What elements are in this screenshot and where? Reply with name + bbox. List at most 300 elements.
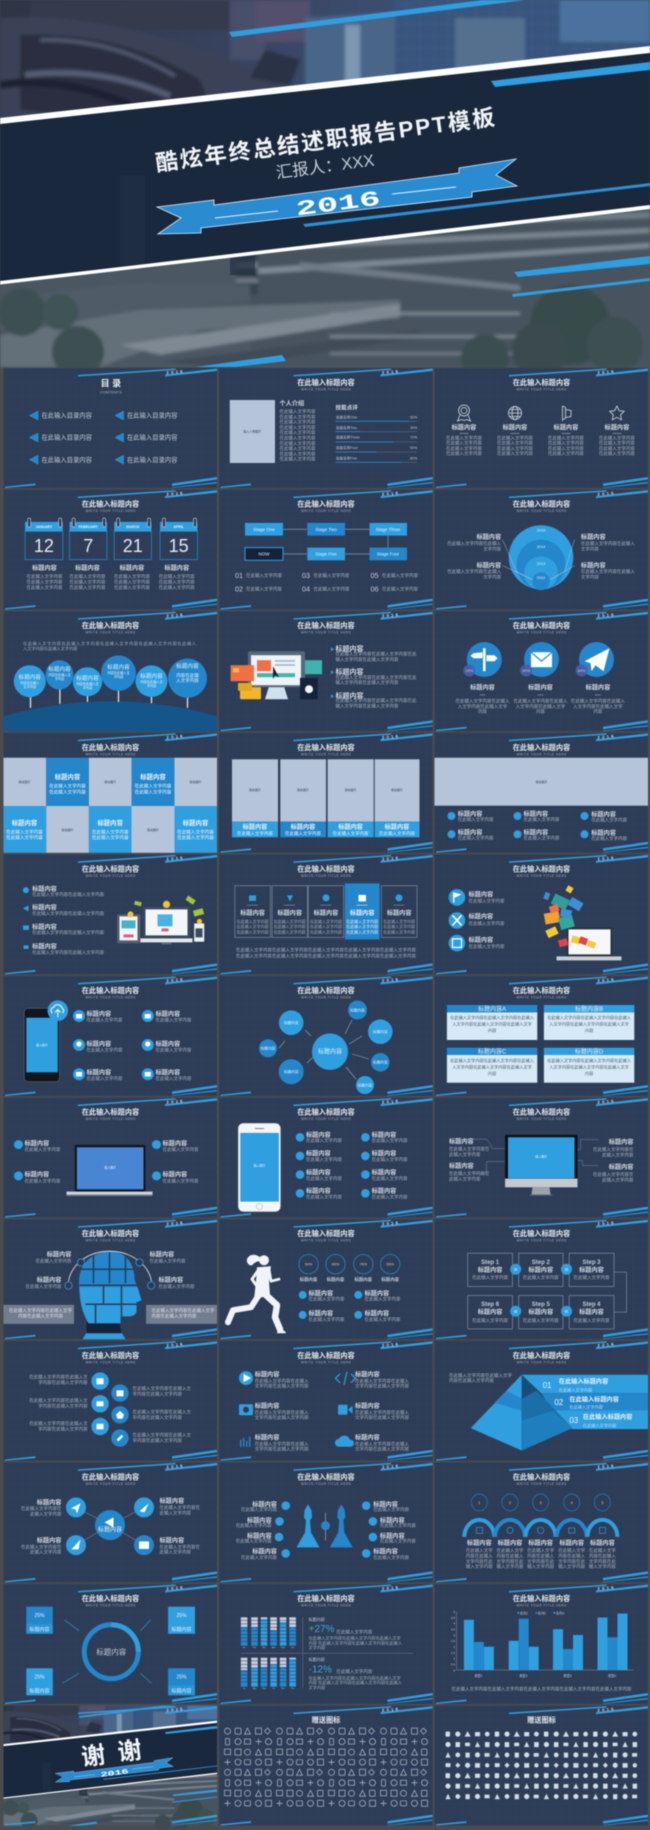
slide: phone features: WRITE YOUR TITLE HERE (86, 996, 136, 1000)
slide: trees: 在此输入标题内容 (82, 621, 139, 630)
lower stat: -12% (309, 1664, 332, 1676)
column cards: 标题内容 (240, 909, 265, 917)
right text: 标题内容 (609, 1138, 634, 1146)
calendar cards: MARCH (126, 525, 140, 529)
media text: 标题内容 (355, 1402, 380, 1410)
items: 标题内容 (458, 828, 482, 836)
runner silhouette (228, 1255, 286, 1333)
captions: 标题内容 (586, 684, 610, 692)
intro text: 在此输入文字内容在此输入文字 (449, 1372, 512, 1379)
column cards: 在此输入文字内容 (274, 929, 306, 935)
intro text (280, 400, 316, 463)
image and text tiles: 标题内容 (97, 818, 124, 827)
bullet text (331, 644, 417, 710)
image and text tiles: 在此输入文字内容 (92, 834, 129, 841)
photo cards: 在此输入文字内容 (285, 830, 321, 837)
pyramid chart: 在此输入标题内容 (569, 1395, 619, 1403)
step boxes: 在此输入文字内容 (472, 1274, 509, 1281)
striped bars: April (272, 1646, 276, 1649)
feature items: 标题内容 (306, 1150, 331, 1158)
contents list: 在此输入目录内容 (127, 411, 178, 420)
step boxes: Step 6 (481, 1302, 500, 1308)
slide: four icons: WRITE YOUR TITLE HERE (516, 388, 566, 392)
slide: five arches: 2016 (597, 1463, 614, 1470)
percent rings: 标题内容 (355, 1276, 373, 1283)
nested oval chart: 2013 (537, 562, 545, 566)
right labels (581, 533, 635, 581)
head illustration (65, 1251, 155, 1339)
column cards: 在此输入文字内容 (383, 929, 415, 935)
slide: email illustration: 在此输入标题内容 (513, 864, 570, 873)
calendar cards (25, 518, 198, 560)
percent rings: 标题内容 (381, 1276, 400, 1283)
numbered list: 在此输入文字内容 (382, 572, 418, 579)
slide: alternating circles: 在此输入标题内容 (82, 1351, 139, 1360)
right labels: 在此输入文字内容在 (160, 1504, 200, 1511)
left labels: 在此输入文字内容在 (21, 1543, 62, 1550)
captions: 内容 (593, 708, 603, 715)
media text (255, 1370, 409, 1452)
arch captions: 输入文字内容 (527, 1563, 555, 1570)
left labels: 此输入文字内容 (30, 1549, 62, 1556)
percent rings: 54% (305, 1263, 313, 1267)
feature items: 在此输入文字内容 (162, 1177, 199, 1184)
step boxes: 在此输入文字内容 (472, 1317, 509, 1324)
nested oval chart: 2015 (537, 529, 545, 533)
image and text tiles: 在此输入文字内容 (49, 788, 86, 795)
icon list: 在此输入文字内容 (468, 920, 505, 927)
slide: trees (4, 611, 217, 731)
pyramid chart: 在此输入文字内容 (559, 1386, 592, 1393)
slide: trees: WRITE YOUR TITLE HERE (86, 631, 136, 635)
cards A-D: 入文字内容在此输入文字内容在此输入文字 (452, 1064, 532, 1070)
skill bars: 技能名称Four (336, 445, 359, 450)
slide: four photos: 2016 (382, 734, 399, 740)
slide: outline icon set: 2016 (382, 1706, 399, 1713)
slide: stage flow: 在此输入标题内容 (297, 500, 355, 509)
skill bars: 80% (410, 456, 418, 460)
left labels (447, 533, 502, 581)
slide: pyramid: 2016 (597, 1342, 614, 1348)
image and text tiles: 填充图片 (61, 827, 74, 832)
slide: bubble diagram: 在此输入标题内容 (297, 986, 355, 995)
slide: email illustration (434, 854, 648, 974)
slide: solid icon set (434, 1706, 648, 1826)
items: 标题内容 (524, 810, 548, 818)
slide: alternating circles: 2016 (166, 1342, 183, 1348)
left labels: 在此输入文字内容在此输入 (447, 540, 502, 547)
icon captions: 在此输入文字内容 (497, 440, 533, 447)
skill bars: 50% (410, 446, 418, 450)
side text boxes: 在此输入文字内容在此输入文字 (9, 1307, 72, 1314)
striped bars: Jan (242, 1647, 246, 1649)
feature items: 标题内容 (306, 1169, 331, 1177)
icon list: 标题内容 (468, 912, 493, 920)
slide: head puzzle (4, 1219, 217, 1339)
right labels: 在此输入文字内容在 (160, 1543, 200, 1550)
column cards (235, 883, 417, 939)
items (299, 1289, 401, 1323)
percent tiles: 标题内容 (171, 1626, 192, 1633)
captions: 在此输入文字内容在此输入 (456, 698, 510, 705)
striped bars: Nov (281, 1688, 285, 1690)
left text: 此输入文字内容 (449, 1175, 481, 1182)
percent rings: 65% (332, 1263, 340, 1267)
calendar captions: 在此输入文字内容 (26, 573, 63, 580)
icon list: 标题内容 (468, 890, 493, 898)
calendar cards: JANUARY (36, 525, 53, 529)
left labels: 标题内容 (476, 562, 501, 570)
captions: 内容 (536, 708, 545, 715)
photo cards: 标题内容 (243, 823, 267, 831)
skill bars: 技能名称Two (336, 425, 357, 430)
right text: 字内容在此输入文字内容 (132, 1437, 182, 1444)
media icons (239, 1371, 356, 1447)
photo cards: 填充图片 (391, 787, 403, 792)
monitor mockup: 插入图片 (535, 1154, 547, 1159)
right text: 标题内容 (609, 1163, 634, 1171)
bar chart: 系列2 (538, 1610, 546, 1615)
image and text tiles: 在此输入文字内容 (6, 828, 43, 835)
slide: calendars: WRITE YOUR TITLE HERE (86, 509, 136, 513)
slide: web illustration: 2016 (382, 612, 399, 618)
slide: four text cards: 2016 (597, 977, 614, 983)
contents list (30, 411, 178, 464)
items: 标题内容 (591, 829, 616, 837)
right labels: 在此输入文字内容在此输入 (581, 540, 635, 547)
cards A-D: 在此输入文字内容在此输入文字内容在此输入 (450, 1014, 535, 1021)
slide: column chart: 在此输入标题内容 (513, 1594, 570, 1603)
slide: personal intro: WRITE YOUR TITLE HERE (301, 388, 351, 392)
photo cards (232, 759, 420, 837)
presenter line: 汇报人：XXX (275, 151, 375, 182)
numbered circles: 1 (478, 1500, 481, 1505)
slide: phone features: 在此输入标题内容 (82, 986, 139, 995)
heading: 目 录 (101, 378, 121, 388)
right labels: 此输入文字内容 (160, 1549, 191, 1556)
flow diagram: Stage Five (315, 552, 337, 557)
captions: 在此输入文字内容在此输入 (571, 698, 625, 705)
slide: checkerboard grid: 在此输入标题内容 (82, 743, 139, 752)
slide: stacked bars and stats (219, 1584, 432, 1704)
items: 标题内容 (591, 810, 616, 818)
right labels: 标题内容 (581, 533, 606, 541)
slide: three icon circles: 2016 (597, 612, 614, 618)
slide: runner: 在此输入标题内容 (297, 1229, 355, 1238)
portrait placeholder: 插入人物图片 (243, 429, 261, 434)
right labels: 标题内容 (380, 1516, 405, 1524)
slide: laptop: 在此输入标题内容 (82, 1108, 139, 1117)
left labels: 在此输入文字内容 (241, 1506, 277, 1513)
arch captions: 标题内容 (467, 1539, 492, 1547)
bar chart: 4.5 (451, 1616, 455, 1620)
calendar captions: 在此输入文字内容 (159, 573, 195, 580)
tree illustration: 标题内容 (107, 663, 130, 671)
arch captions: 内容在此输入 (589, 1553, 616, 1560)
upper stat: 在此输入文字内容 (336, 1628, 373, 1636)
captions: 入文字内容在此输入文字 (516, 703, 566, 710)
left labels: 标题内容 (252, 1548, 277, 1556)
captions (456, 684, 625, 715)
intro text: 在此输入文字内容 (280, 424, 316, 431)
tree illustration: 标题内容 (140, 672, 163, 680)
bullet text: 在此输入文字内容在此输入文字内容在此 (336, 651, 417, 658)
tree illustration: 内容在此输入 (20, 680, 40, 685)
calendar cards: 7 (83, 536, 93, 556)
slide: stage flow: WRITE YOUR TITLE HERE (301, 509, 351, 513)
slide: phone features (4, 976, 217, 1096)
column cards: 在此输入文字内容 (346, 918, 378, 924)
striped bars: Oct (272, 1687, 276, 1690)
right text: 此输入文字内容 (602, 1151, 634, 1158)
calendar cards: 15 (169, 536, 189, 556)
step boxes: « (565, 1308, 569, 1315)
slide: personal intro: 2016 (382, 369, 399, 375)
contents list: 在此输入目录内容 (42, 411, 93, 420)
numbered list: 在此输入文字内容 (382, 586, 418, 593)
slide: four text cards: WRITE YOUR TITLE HERE (516, 996, 566, 1000)
image and text tiles: 在此输入文字内容 (135, 788, 172, 795)
step boxes: 标题内容 (478, 1308, 502, 1316)
contents list: 在此输入目录内容 (127, 455, 178, 464)
image and text tiles: 标题内容 (55, 772, 81, 781)
slide: iphone: WRITE YOUR TITLE HERE (301, 1117, 351, 1121)
step boxes: » (514, 1266, 518, 1273)
step boxes: 标题内容 (579, 1308, 604, 1316)
lower stat: 内容 在此输入文字内容在此输入文字内容在此输入 (309, 1679, 403, 1686)
striped bars: Aug (253, 1687, 256, 1690)
slide: iphone (219, 1098, 432, 1218)
percent rings (299, 1254, 400, 1283)
calendar cards: 12 (34, 536, 54, 556)
media text: 标题内容 (255, 1370, 279, 1378)
feature items: 在此输入文字内容 (306, 1175, 342, 1182)
pyramid chart: 02 (554, 1398, 564, 1407)
icon row (458, 405, 624, 421)
bubbles (259, 1000, 393, 1094)
slide: bubble diagram (219, 976, 432, 1096)
arch captions: 在此输入文字 (527, 1547, 555, 1554)
bullet text: 在此输入文字内容在此输入文字内容在此 (336, 697, 417, 704)
illustration: emails and laptop (543, 885, 622, 960)
column cards: 在此输入文字内容 (310, 918, 342, 924)
image and text tiles: 在此输入文字内容 (177, 834, 214, 841)
slide: three icon circles: WRITE YOUR TITLE HERE (516, 631, 566, 635)
left labels: 标题内容 (247, 1516, 272, 1524)
labels: 标题内容 (158, 1276, 183, 1284)
column cards: 在此输入文字内容 (383, 923, 415, 929)
slide: laptop: WRITE YOUR TITLE HERE (86, 1117, 136, 1121)
bar chart: 5 (453, 1610, 455, 1614)
intro text: 在此输入文字内容 (280, 440, 316, 447)
percent tiles: 标题内容 (29, 1688, 50, 1694)
numbered list: 在此输入文字内容 (314, 572, 350, 579)
nested oval chart (502, 525, 574, 590)
items: 在此输入文字内容 (524, 816, 560, 823)
feature items: 标题内容 (162, 1139, 187, 1147)
arch captions (466, 1539, 616, 1570)
labels (26, 1251, 195, 1290)
tree illustration: 字内容 (83, 685, 93, 690)
feature items: 在此输入文字内容 (306, 1156, 342, 1163)
feature items: 标题内容 (24, 1139, 49, 1147)
feature items: 标题内容 (156, 1010, 180, 1018)
arch captions: 内容在此输入 (496, 1553, 524, 1560)
slide: five columns (219, 854, 432, 974)
slide: stacked bars and stats: 2016 (382, 1585, 399, 1591)
right text: 字内容在此输入文字内容 (132, 1391, 182, 1398)
arch captions: 输入文字内容 (558, 1563, 586, 1570)
hill (4, 701, 217, 731)
upper stat: 内容 在此输入文字内容在此输入文字内容在此输入 (309, 1639, 403, 1646)
tree illustration: 标题内容 (48, 665, 71, 673)
skill bars: 30% (410, 426, 418, 430)
monitor mockup (505, 1135, 578, 1196)
tree illustration: 标题内容 (76, 674, 99, 682)
right labels: 标题内容 (380, 1532, 405, 1540)
left labels: 标题内容 (476, 533, 501, 541)
bubbles: 标题内容 (284, 1020, 299, 1025)
right labels: 文字内容 (581, 546, 599, 553)
percent tiles: 标题内容 (29, 1626, 50, 1633)
slide: thank you: 2016 (166, 1706, 183, 1713)
left labels: 标题内容 (37, 1537, 62, 1545)
pyramid chart: 01 (543, 1381, 552, 1390)
slide: four text cards (434, 976, 648, 1096)
left text: 标题内容 (449, 1162, 474, 1170)
cards A-D (447, 1005, 634, 1083)
feature items: 标题内容 (24, 1171, 49, 1179)
slide: alternating circles: WRITE YOUR TITLE HERE (86, 1360, 136, 1364)
slide: stacked bars and stats: WRITE YOUR TITLE HERE (301, 1604, 351, 1608)
list: 标题内容 (32, 885, 57, 893)
items: 在此输入文字内容 (308, 1296, 345, 1303)
icon circles: 50% (522, 669, 531, 673)
captions: 在此输入文字内容在此输入 (514, 698, 568, 705)
slide: six steps: 在此输入标题内容 (513, 1229, 570, 1238)
percent tiles: 25% (176, 1674, 187, 1680)
bullet text: 输入文字内容在此输入文字内容 (336, 656, 399, 663)
skill bars (336, 404, 418, 463)
icon circles: 84% (578, 669, 586, 673)
left labels: 文字内容 (483, 574, 502, 581)
column cards: 在此输入文字内容 (237, 923, 269, 929)
arch captions: 在此输入文字 (466, 1547, 493, 1554)
intro text: 在此输入文字内容 (280, 408, 316, 415)
icon captions: 在此输入文字内容 (599, 445, 635, 452)
nested oval chart: 2014 (537, 545, 545, 549)
feature items: 在此输入文字内容 (24, 1146, 61, 1153)
items: 在此输入文字内容 (364, 1296, 401, 1303)
right labels: 标题内容 (373, 1548, 398, 1556)
bullet text: 标题内容 (336, 667, 364, 676)
column cards: 在此输入文字内容 (346, 923, 378, 929)
cards A-D: 在此输入文字内容在此输入文字内容在此输入 (547, 1057, 632, 1064)
photo cards: 填充图片 (297, 787, 309, 792)
arch captions: 内容在此输入 (466, 1553, 493, 1560)
bullet text: 在此输入文字内容在此输入文字内容在此 (336, 674, 417, 681)
list: 在此输入文字内容在此输入文字内容 (32, 910, 105, 917)
feature items: 在此输入文字内容 (162, 1146, 199, 1153)
upper stat: 在此输入文字内容在此输入文字内容在此输入文字 (309, 1634, 401, 1642)
phone mockup (24, 1000, 68, 1082)
icon list (449, 889, 505, 951)
bar chart: 类型1 (474, 1673, 483, 1678)
slide: column chart: 2016 (597, 1585, 614, 1591)
numbered list: 06 (370, 584, 378, 593)
slide: phone features: 2016 (166, 977, 183, 983)
radial nodes: 标题内容 (98, 1525, 122, 1533)
slide: list with devices: 在此输入标题内容 (82, 864, 139, 873)
feature items: 标题内容 (162, 1171, 187, 1179)
slide: calendars: 在此输入标题内容 (82, 500, 139, 509)
striped bars: Mar (262, 1647, 266, 1649)
illustration: devices (117, 895, 204, 944)
right text: 在此输入文字内容在 (593, 1171, 634, 1178)
numbered list: 在此输入文字内容 (246, 586, 282, 593)
list: 在此输入文字内容在此输入文字内容 (32, 949, 105, 956)
striped bars: Jun (291, 1647, 294, 1649)
right text: 在此输入文字内容在此输入文 (132, 1385, 191, 1392)
numbered circles (471, 1494, 610, 1511)
bubbles: 标题内容 (350, 1007, 365, 1012)
intro text (449, 1372, 512, 1384)
step boxes: Step 4 (582, 1302, 601, 1308)
icon captions: 标题内容 (605, 424, 629, 432)
bottom text: 在此输入文字内容在此输入文字内容在此输入文字内容在此输入文字内容在此输入文字内容 (236, 953, 416, 960)
captions: 内容 (478, 708, 487, 715)
slide: head puzzle: WRITE YOUR TITLE HERE (86, 1239, 136, 1243)
left text: 在此输入文字内容在此输入文 (29, 1397, 88, 1404)
skill bars: 技能名称Three (336, 434, 360, 440)
media text: 在此输入文字内容在此输入 (355, 1377, 409, 1384)
intro text: 在此输入文字内容在此输入文字内容在此输入文字内容在此输入文字内容在此输入 (23, 640, 197, 647)
slide: nested ovals (434, 490, 648, 610)
slide: checkerboard grid: 2016 (166, 734, 183, 740)
list: 在此输入文字内容在此输入文字内容 (32, 929, 105, 936)
left text (29, 1374, 88, 1432)
slide: twin towers: 在此输入标题内容 (297, 1472, 355, 1481)
image and text tiles: 标题内容 (12, 818, 38, 827)
bar chart: 0.5 (451, 1662, 455, 1666)
image and text tiles: 在此输入文字内容 (177, 828, 214, 835)
slide: runner: 2016 (382, 1220, 399, 1226)
icon captions: 在此输入文字内容 (497, 445, 533, 452)
pyramid chart: 在此输入文字内容 (583, 1422, 616, 1429)
image and text tiles: 标题内容 (140, 772, 166, 781)
lower stat: 在此输入文字内容在此输入文字内容在此输入文字 (309, 1674, 401, 1681)
arch captions: 在此输入文字 (558, 1547, 586, 1554)
subheading: CONTENTS (100, 390, 122, 394)
slide: ring and tiles: 2016 (166, 1585, 183, 1591)
feature items: 标题内容 (156, 1068, 180, 1076)
pyramid chart: 在此输入标题内容 (559, 1378, 608, 1386)
photo cards: 标题内容 (385, 823, 409, 831)
arch row (464, 1520, 617, 1537)
image and text tiles (4, 758, 217, 853)
slide: web illustration (219, 611, 432, 731)
main title: 酷炫年终总结述职报告PPT模板 (154, 105, 497, 176)
arch captions: 文字内容在此 (558, 1558, 586, 1565)
media text: 标题内容 (355, 1433, 380, 1441)
slide: outline icon set (219, 1706, 432, 1826)
media text: 文字内容在此输入文字内容 (255, 1446, 309, 1453)
ring chart: 标题内容 (96, 1646, 127, 1656)
pyramid chart: 在此输入标题内容 (583, 1413, 632, 1421)
media text: 文字内容在此输入文字内容 (255, 1383, 309, 1390)
slide: head puzzle: 在此输入标题内容 (82, 1229, 139, 1238)
left text: 字内容在此输入文字内容 (38, 1379, 88, 1386)
